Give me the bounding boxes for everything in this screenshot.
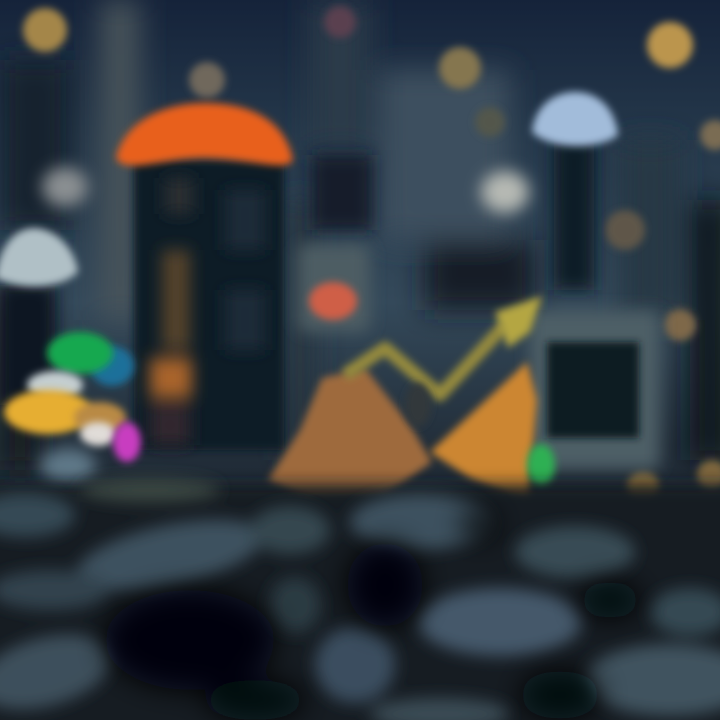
- blue domed tower: [532, 92, 618, 290]
- arrow stroke: [345, 325, 505, 395]
- left grey orb: [42, 167, 88, 207]
- white lit dome: [481, 171, 529, 213]
- dark gaps between coins: [105, 511, 640, 720]
- orange roof: [116, 103, 293, 166]
- orange triangle: [430, 362, 537, 502]
- dark mid building: [312, 155, 372, 230]
- background buildings: [0, 0, 720, 470]
- rising chart shape: orange bars and arrow: [268, 296, 555, 502]
- green accent: [527, 444, 555, 486]
- monitor: [530, 310, 660, 470]
- brown bag shape: [268, 368, 432, 500]
- colored balloons: [4, 332, 141, 484]
- arrow head: [495, 296, 542, 348]
- dark tower with orange roof: [116, 103, 293, 450]
- foreground coins ground: [0, 478, 720, 720]
- center sign with red light: [298, 244, 370, 332]
- left dome building: [0, 228, 78, 405]
- dark gap: [405, 383, 431, 427]
- tower windows: [150, 178, 265, 445]
- glowing lamps: [23, 6, 720, 503]
